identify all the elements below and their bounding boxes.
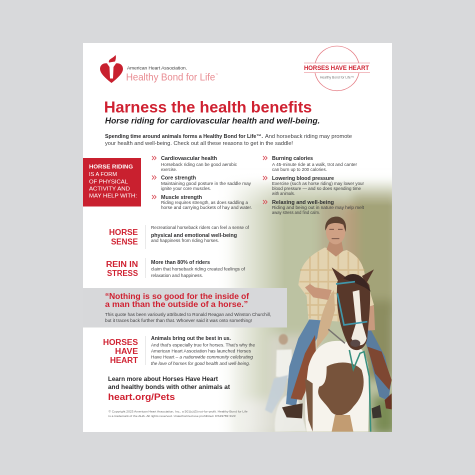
head	[326, 223, 346, 244]
text: and happiness from riding horses.	[151, 238, 219, 243]
photo backdrop	[225, 180, 400, 440]
benefit: core strength: Core strength	[161, 176, 196, 182]
attribution text	[105, 312, 271, 323]
panel: horse riding callout	[83, 158, 141, 206]
benefit: cardiovascular health	[161, 156, 238, 172]
benefit: muscle strength: Muscle strength	[161, 195, 202, 201]
icon: chevron	[152, 156, 156, 160]
intro text: And horseback riding may promote	[265, 134, 352, 140]
benefit: lowering blood pressure: Exercise (such as horse riding) may lower your	[272, 181, 364, 186]
text	[151, 225, 250, 243]
halter	[336, 282, 367, 325]
benefit: muscle strength: horse and carrying buckets of hay and water.	[161, 205, 252, 210]
text: More than 80% of riders	[151, 260, 210, 266]
panel: horse riding callout: HORSE RIDING	[89, 164, 133, 170]
text: Recreational horseback riders can feel a sense of	[151, 225, 250, 230]
heading: HORSES	[103, 338, 139, 347]
hair	[325, 217, 346, 232]
text: physical and emotional well-being	[151, 233, 237, 239]
subtitle: Horse riding for cardiovascular health and well-being.	[105, 116, 320, 126]
benefit: cardiovascular health: exercise.	[161, 167, 177, 172]
Healthy Bond for Life wordmark: Healthy Bond for Life	[126, 72, 221, 84]
text: American Heart Association has launched Horses	[151, 348, 252, 354]
forearm	[305, 284, 332, 300]
white fade left	[219, 179, 280, 432]
panel: horse riding callout: OF PHYSICAL	[89, 179, 128, 185]
call to action: Learn more about Horses Have Heart	[108, 376, 218, 383]
text: Have Heart – a nationwide community celebrating	[151, 354, 253, 360]
benefit: relaxing and well-being: away stress and find calm.	[272, 210, 320, 215]
horse body	[305, 341, 369, 432]
text	[151, 260, 246, 278]
saddle	[291, 335, 317, 400]
lead rope	[349, 350, 371, 432]
attribution text: This quote has been variously attributed to Ronald Reagan and Winston Churchill,	[105, 312, 271, 317]
quote: a man than the outside of a horse.”	[105, 300, 248, 309]
copyright	[108, 410, 248, 418]
muzzle	[350, 340, 360, 347]
shirt	[298, 247, 374, 322]
benefit: lowering blood pressure: blood pressure — and so does spending time	[272, 186, 361, 191]
benefits list: column one	[152, 156, 252, 210]
benefit: core strength	[161, 176, 252, 191]
icon: chevron	[263, 176, 267, 180]
badge: Horses Have Heart: HORSES HAVE HEART	[304, 65, 369, 72]
heading	[103, 338, 139, 365]
icon: chevron	[152, 176, 156, 180]
text	[151, 336, 255, 366]
intro text	[105, 134, 352, 147]
text: the love of horses for good health and well-being.	[151, 361, 250, 366]
forelock	[343, 274, 371, 292]
benefits list: column two	[263, 156, 365, 215]
benefit: relaxing and well-being: Riding and being out in nature may help melt	[272, 205, 365, 210]
link: heart.org/Pets	[108, 392, 175, 403]
left arm	[368, 305, 375, 331]
panel: horse riding callout: MAY HELP WITH:	[89, 194, 137, 200]
heading: HORSE	[109, 228, 139, 237]
title: Harness the health benefits	[104, 100, 312, 116]
quote: “Nothing is so good for the inside of	[105, 292, 249, 301]
benefit: core strength: ignite your core muscles.	[161, 186, 211, 191]
text: claim that horseback riding created feelings of	[151, 266, 246, 272]
panel: horse riding callout: IS A FORM	[89, 172, 117, 178]
organization name: American Heart Association.	[127, 66, 187, 70]
benefit: burning calories: can burn up to 200 calories.	[272, 167, 327, 172]
mane	[317, 290, 335, 348]
text: Animals bring out the best in us.	[151, 336, 231, 342]
section: rein in stress	[106, 258, 246, 278]
call to action: and healthy bonds with other animals at	[108, 384, 230, 391]
benefit: burning calories	[272, 156, 357, 172]
benefit: lowering blood pressure: Lowering blood pressure	[272, 176, 334, 182]
logo: American Heart Association heart and torch	[100, 55, 218, 84]
heading: REIN IN	[106, 260, 138, 269]
Healthy Bond for Life wordmark: ™	[215, 72, 218, 76]
badge: Horses Have Heart	[304, 46, 370, 91]
benefit: relaxing and well-being: Relaxing and well-being	[272, 200, 334, 206]
brown chest patch	[318, 363, 364, 415]
horse head	[337, 276, 370, 350]
section: horses have heart	[103, 336, 255, 366]
heading: HAVE	[115, 347, 139, 356]
benefit: core strength: Maintaining good posture in the saddle may	[161, 181, 252, 186]
benefit: lowering blood pressure	[272, 176, 364, 196]
icon: heart and torch	[100, 55, 123, 83]
heading	[109, 228, 139, 246]
white sheet	[83, 43, 392, 432]
main rider and horse	[282, 217, 392, 432]
benefit: cardiovascular health: Cardiovascular health	[161, 156, 217, 162]
heading: HEART	[110, 356, 138, 365]
icon: chevron	[263, 156, 267, 160]
benefit: cardiovascular health: Horseback riding can be good aerobic	[161, 162, 238, 167]
boots	[282, 403, 303, 418]
facial features	[329, 229, 343, 239]
icon: chevron	[152, 195, 156, 199]
benefit: burning calories: A 45-minute ride at a walk, trot and canter	[272, 162, 357, 167]
attribution text: but it traces back further than that. Whoever said it was onto something!	[105, 318, 252, 323]
text: relaxation and happiness.	[151, 273, 203, 278]
background rider	[265, 334, 307, 432]
copyright: is a trademark of the AHA. All rights reserved. Unauthorized use prohibited. DS19783 3/23	[108, 414, 236, 418]
benefit: muscle strength	[161, 195, 252, 210]
badge: Horses Have Heart: Healthy Bond for Life™	[320, 76, 354, 80]
panel: quote	[83, 288, 287, 328]
heading: SENSE	[111, 238, 139, 246]
icon: chevron	[263, 200, 267, 204]
photo: horseback rider	[230, 178, 392, 432]
ears	[332, 268, 345, 281]
benefit: burning calories: Burning calories	[272, 156, 313, 162]
call to action	[108, 376, 230, 403]
heading	[106, 260, 139, 278]
quote	[105, 292, 249, 309]
heading: STRESS	[107, 269, 139, 278]
benefit: relaxing and well-being	[272, 200, 365, 215]
panel: horse riding callout: ACTIVITY AND	[89, 186, 130, 192]
benefit: muscle strength: Riding requires strength, as does saddling a	[161, 200, 248, 205]
text: And that's especially true for horses. That's why the	[151, 342, 255, 348]
benefit: lowering blood pressure: with animals.	[272, 191, 295, 196]
intro text: Spending time around animals forms a Healthy Bond for Life™.	[105, 134, 264, 140]
neck	[327, 242, 343, 257]
copyright: © Copyright 2023 American Heart Association, Inc., a 501(c)(3) not-for-profit. Healthy Bond for Life	[108, 410, 248, 414]
jeans	[286, 320, 320, 406]
section: horse sense	[109, 225, 250, 249]
intro text: your health and well-being. Check out all these reasons to get in the saddle!	[105, 141, 293, 147]
white fade top	[234, 174, 392, 204]
white blaze	[351, 290, 367, 345]
